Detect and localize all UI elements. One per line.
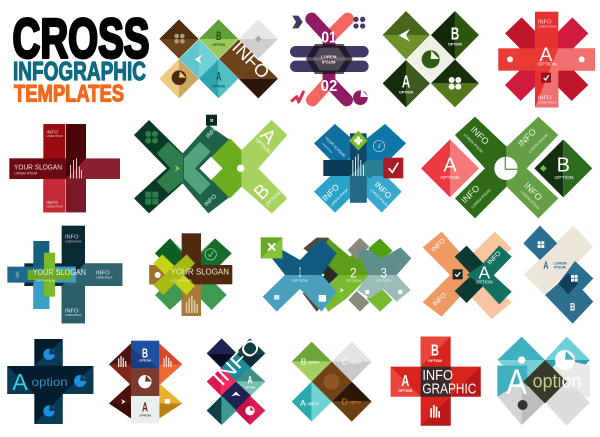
panel: red cross infographic: INFO <box>422 368 453 384</box>
panel: red cross infographic: GRAPHIC <box>422 381 477 397</box>
panel: green double X: OPTION <box>254 137 272 155</box>
panel: four diamonds option A B C D <box>292 342 372 422</box>
panel: teal and grey octagon option A: A <box>506 363 528 402</box>
panel: teal and lime overlapping crosses: LOREM IPSUM <box>65 241 81 243</box>
panel: olive green four diamonds: OPTION <box>399 90 413 94</box>
panel: three option X blue green grey: OPTION <box>292 278 308 283</box>
panel: beige band with blue diamonds: IPSUM <box>554 265 566 269</box>
panel: four diamonds option A B C D: option <box>349 400 362 405</box>
panel: brown green teal diamonds: OPTION <box>212 43 226 47</box>
panel: brown and lime cross: LOREM IPSUM <box>171 279 192 283</box>
panel: four diamonds option A B C D: option <box>349 360 362 365</box>
panel: beige band with blue diamonds <box>523 226 593 324</box>
panel: three option X blue green grey <box>261 237 411 312</box>
panel: teal and grey octagon option A <box>497 337 590 426</box>
panel: teal and lime overlapping crosses: LOREM IPSUM <box>34 278 56 282</box>
panel: orange and dark green X: INFO <box>432 292 448 308</box>
panel: three option X blue green grey: OPTION <box>346 278 361 283</box>
panel: pink navy teal diamonds INFO <box>207 334 265 425</box>
panel: red cross with option A: A <box>540 45 553 66</box>
panel: red cross with option A <box>498 12 595 107</box>
panel: brown and lime cross: YOUR SLOGAN <box>171 267 229 277</box>
title <box>12 6 150 107</box>
panel: green double X: INFO <box>204 193 218 208</box>
panel: teal and lime overlapping crosses: INFO <box>65 308 79 314</box>
panel: 01 02 purple coral cross: 02 <box>321 78 337 95</box>
panel: pink navy teal diamonds INFO: OPTION <box>245 385 255 389</box>
panel: dark red cross your slogan: YOUR SLOGAN <box>14 162 62 171</box>
panel: green X with red and dark diamonds: B <box>557 155 570 177</box>
panel: square and diamonds brown blue: OPTION <box>139 413 151 417</box>
panel: beige band with blue diamonds: LOREM <box>553 261 567 265</box>
panel: 01 02 purple coral cross: 01 <box>321 29 337 46</box>
panel: green X with red and dark diamonds <box>421 117 592 218</box>
panel: green X with red and dark diamonds: OPTION <box>440 175 460 181</box>
panel: teal and lime overlapping crosses <box>7 226 122 323</box>
panel: green double X: A <box>256 125 280 149</box>
panel: teal and lime overlapping crosses: YOUR SLOGAN <box>33 268 86 277</box>
panel: square and diamonds brown blue: B <box>142 346 148 361</box>
panel: pink navy teal diamonds INFO: INFO <box>209 334 265 391</box>
panel: green double X <box>134 115 287 213</box>
panel: red cross infographic <box>391 337 481 426</box>
panel: blue X with red check: INFO <box>373 179 394 201</box>
panel: green X with red and dark diamonds: INFO <box>459 183 482 205</box>
panel: dark red cross your slogan: INFO <box>46 129 58 135</box>
panel: green X with red and dark diamonds: LOREM IPSUM <box>528 133 549 154</box>
panel: orange and dark green X: OPTION <box>476 279 493 284</box>
panel: four diamonds option A B C D: A <box>300 398 306 408</box>
panel: brown green teal diamonds <box>159 19 278 98</box>
title: TEMPLATES <box>14 80 124 107</box>
panel: dark red cross your slogan <box>9 124 120 212</box>
panel: red cross with option A: INFO <box>538 95 552 101</box>
panel: green X with red and dark diamonds: INFO <box>516 126 538 149</box>
panel: brown green teal diamonds: A <box>216 70 222 84</box>
panel: square and diamonds brown blue: A <box>142 400 148 415</box>
panel: red cross infographic: OPTION <box>428 359 442 363</box>
panel: dark red cross your slogan: LOREM IPSUM <box>14 172 38 176</box>
panel: orange and dark green X <box>423 232 512 319</box>
panel: blue X with red check: LOREM IPSUM <box>321 143 332 154</box>
panel: brown and lime cross <box>149 233 232 316</box>
panel: red cross with option A: LOREM IPSUM <box>538 25 557 29</box>
panel: beige band with blue diamonds: A <box>543 260 549 272</box>
panel: green X with red and dark diamonds: INFO <box>469 124 491 147</box>
panel: brown green teal diamonds: B <box>216 29 222 43</box>
panel: navy cross option A: A <box>12 369 28 395</box>
panel: olive green four diamonds: A <box>402 71 410 91</box>
panel: blue X with red check: LOREM IPSUM <box>369 188 389 207</box>
panel: orange and dark green X: INFO <box>430 238 447 254</box>
panel: blue X with red check: LOREM IPSUM <box>330 188 349 207</box>
panel: 01 02 purple coral cross: LOREM <box>321 54 337 59</box>
panel: teal and lime overlapping crosses: INFO <box>65 234 79 240</box>
panel: dark red cross your slogan: LOREM IPSUM <box>46 136 63 138</box>
panel: green double X: INFO <box>205 125 220 140</box>
panel: three option X blue green grey: 3 <box>380 265 387 281</box>
panel: orange and dark green X: A <box>479 262 491 282</box>
panel: green double X: × <box>210 117 214 124</box>
panel: four diamonds option A B C D: option <box>307 401 320 406</box>
title: CROSS <box>12 6 150 70</box>
panel: blue X with red check <box>314 124 406 213</box>
panel: dark red cross your slogan: LOREM IPSUM <box>46 207 63 209</box>
panel: red cross with option A: OPTION <box>537 62 557 68</box>
panel: 01 02 purple coral cross: IPSUM <box>322 59 336 64</box>
panel: olive green four diamonds: OPTION <box>448 42 462 46</box>
panel: green X with red and dark diamonds: INFO <box>522 180 544 203</box>
panel: green X with red and dark diamonds: OPTION <box>554 175 574 181</box>
panel: red cross with option A: LOREM IPSUM <box>538 100 557 104</box>
panel: red cross with option A: INFO <box>538 20 552 26</box>
panel: square and diamonds brown blue: OPTION <box>139 359 151 363</box>
panel: three option X blue green grey: 2 <box>350 265 357 281</box>
panel: pink navy teal diamonds INFO: A <box>247 374 253 386</box>
panel: orange and dark green X: INFO <box>486 250 503 266</box>
panel: green double X: B <box>250 180 274 204</box>
panel: dark red cross your slogan: INFO <box>46 200 58 206</box>
panel: green X with red and dark diamonds: LOREM IPSUM <box>463 133 484 154</box>
panel: four diamonds option A B C D: option <box>308 360 320 365</box>
panel: beige band with blue diamonds: B <box>570 301 575 313</box>
panel: three option X blue green grey: × <box>267 237 277 256</box>
panel: navy cross option A: option <box>32 375 68 389</box>
panel: four diamonds option A B C D: D <box>342 396 348 406</box>
panel: green X with red and dark diamonds: LOREM IPSUM <box>471 188 491 209</box>
panel: blue X with red check: INFO <box>320 182 342 203</box>
panel: square and diamonds brown blue <box>109 341 182 423</box>
panel: brown green teal diamonds: OPTION <box>212 84 226 88</box>
panel: four diamonds option A B C D: C <box>342 356 348 366</box>
panel: four diamonds option A B C D: B <box>301 356 307 366</box>
panel: teal and lime overlapping crosses: INFO <box>96 270 110 276</box>
panel: red cross infographic: A <box>401 373 409 390</box>
panel: green X with red and dark diamonds: A <box>443 155 457 177</box>
panel: brown green teal diamonds: INFO <box>228 37 273 83</box>
title: INFOGRAPHIC <box>13 56 146 86</box>
panel: green X with red and dark diamonds: LOREM IPSUM <box>519 190 540 210</box>
panel: olive green four diamonds <box>383 11 479 107</box>
panel: three option X blue green grey: 1 <box>299 264 301 280</box>
panel: teal and lime overlapping crosses: LOREM IPSUM <box>96 278 112 280</box>
panel: red cross infographic: B <box>431 343 439 360</box>
panel: navy cross option A <box>7 339 93 424</box>
panel: red cross infographic: OPTION <box>398 389 413 393</box>
panel: olive green four diamonds: B <box>451 23 459 43</box>
panel: blue X with red check: YOUR SLOGAN <box>324 136 346 158</box>
panel: teal and lime overlapping crosses: LOREM IPSUM <box>65 315 81 317</box>
panel: green double X: OPTION <box>265 190 283 208</box>
panel: three option X blue green grey: OPTION <box>376 278 391 283</box>
panel: 01 02 purple coral cross <box>290 16 369 105</box>
panel: teal and grey octagon option A: option <box>533 372 581 393</box>
